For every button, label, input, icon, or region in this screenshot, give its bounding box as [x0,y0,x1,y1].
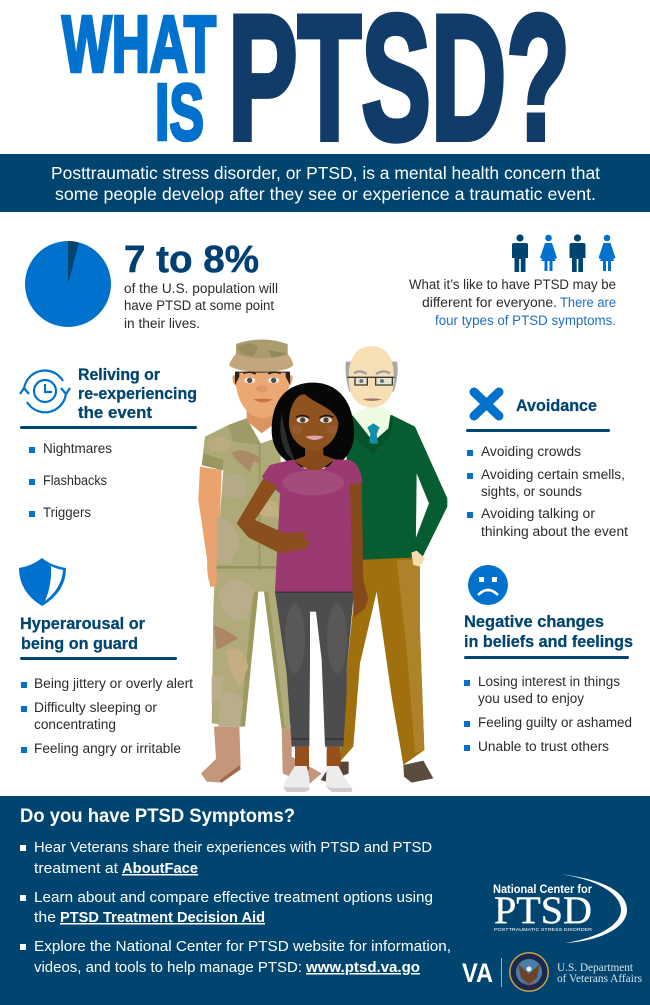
illustration: three people [198,339,447,792]
list: reliving symptoms: Flashbacks [43,473,107,488]
statistic text: of the U.S. population will [124,281,278,296]
panel: negative changes [464,565,633,754]
intro band: some people develop after they see or experience a traumatic event. [55,184,596,204]
list: resources: Learn about and compare effective treatment options using [34,889,433,906]
text: U.S. Department of Veterans Affairs [557,960,642,985]
list: avoidance symptoms: sights, or sounds [481,484,582,499]
heading: reliving [20,366,197,429]
list: resources: www.ptsd.va.go [305,959,420,976]
list: negative change symptoms: you used to enjoy [478,691,584,706]
list: negative change symptoms: Feeling guilty or ashamed [478,715,632,730]
title: WHAT [62,0,216,88]
text: four types of symptoms: different for everyone. [422,295,557,310]
heading: do you have PTSD symptoms: Do you have PTSD Symptoms? [20,806,295,827]
statistic text: have PTSD at some point [124,298,274,313]
pie chart: 7 to 8 percent [25,241,111,327]
logo: National Center for PTSD: National Center for [493,882,592,896]
icon: sad face [468,565,508,605]
intro band: Posttraumatic stress disorder, or PTSD, is a mental health concern that [51,163,600,183]
text: four types of symptoms: There are [560,295,616,310]
list: reliving symptoms: Triggers [43,505,91,520]
text: four types of symptoms: What it’s like to have PTSD may be [409,277,616,292]
list: hyperarousal symptoms: concentrating [34,717,116,732]
list: avoidance symptoms [467,444,628,539]
list: resources: Hear Veterans share their experiences with PTSD and PTSD [34,839,432,856]
list: resources: Explore the National Center for PTSD website for information, [34,938,451,955]
logo: National Center for PTSD: PTSD [494,889,592,932]
logo: National Center for PTSD [493,874,627,943]
list: avoidance symptoms: Avoiding certain smells, [481,467,625,482]
figure: older man [321,346,447,783]
figure: woman [237,383,368,792]
icon: X mark [474,392,499,416]
list: hyperarousal symptoms [21,676,193,756]
icon: four people [512,234,616,272]
heading: negative changes: Negative changes [464,613,604,631]
icon: shield [19,558,66,606]
title [62,0,570,177]
heading: avoidance [466,397,610,432]
logo: National Center for PTSD: POSTTRAUMATIC STRESS DISORDER [494,927,593,932]
panel: reliving [20,366,197,520]
heading: hyperarousal: Hyperarousal or [20,615,146,633]
text: U.S. Department of Veterans Affairs: of Veterans Affairs [557,971,642,985]
list: resources [20,839,451,976]
list: negative change symptoms: Unable to trust others [478,739,609,754]
list: resources: the [34,909,56,926]
list: negative change symptoms [464,674,632,754]
heading: reliving: re-experiencing [78,385,197,403]
heading: negative changes [464,613,633,659]
list: hyperarousal symptoms: Difficulty sleeping or [34,700,158,715]
list: resources: AboutFace [122,860,198,877]
list: reliving symptoms: Nightmares [43,441,112,456]
panel: avoidance [466,392,628,539]
list: hyperarousal symptoms: Feeling angry or irritable [34,741,181,756]
icon: VA seal [509,952,549,992]
figure: soldier [198,339,322,783]
text: four types of symptoms [409,277,616,328]
list: avoidance symptoms: thinking about the event [481,524,628,539]
heading: reliving: Reliving or [78,366,161,384]
list: resources: videos, and tools to help manage PTSD: [34,959,302,976]
heading: hyperarousal: being on guard [21,635,138,653]
statistic text [124,239,278,331]
statistic text: 7 to 8% [124,239,259,281]
heading: hyperarousal [20,615,177,660]
title: IS [155,68,204,156]
list: avoidance symptoms: Avoiding crowds [481,444,581,459]
text: U.S. Department of Veterans Affairs: U.S. Department [557,960,634,974]
text: four types of symptoms: four types of PTSD symptoms. [435,313,616,328]
heading: avoidance: Avoidance [516,397,597,415]
list: resources: treatment at [34,860,119,877]
list: avoidance symptoms: Avoiding talking or [481,506,596,521]
heading: reliving: the event [78,404,153,422]
statistic text: in their lives. [124,316,200,331]
panel: hyperarousal [19,558,193,756]
list: negative change symptoms: Losing interest in things [478,674,620,689]
intro band [0,154,650,212]
heading: negative changes: in beliefs and feelings [464,633,633,651]
panel: do you have symptoms [0,796,650,1005]
list: reliving symptoms [29,441,112,520]
list: hyperarousal symptoms: Being jittery or overly alert [34,676,193,691]
icon: clock with circular arrows [20,371,70,412]
list: resources: PTSD Treatment Decision Aid [60,909,265,926]
logo: VA: VA [462,958,493,988]
